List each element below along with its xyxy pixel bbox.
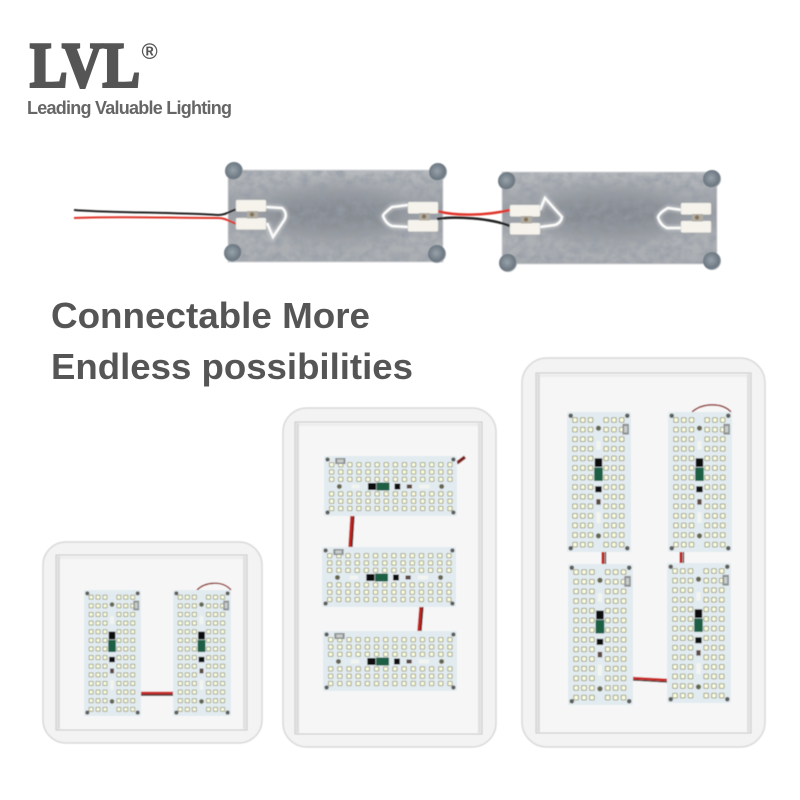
input wires	[74, 209, 237, 224]
wire right column	[681, 552, 684, 563]
headline line 2: Endless possibilities	[51, 346, 413, 387]
LED board bottom	[323, 631, 457, 691]
wire bottom link	[633, 678, 667, 682]
top feed wire	[197, 583, 231, 590]
wire middle to bottom board	[419, 607, 423, 631]
headline line 1: Connectable More	[51, 295, 370, 336]
logo tagline: Leading Valuable Lighting	[27, 98, 232, 118]
lamp: three modules	[283, 408, 496, 747]
feed wire stub	[457, 457, 465, 463]
LED board right	[173, 590, 231, 716]
LED board bottom left	[568, 564, 633, 705]
LED board left	[84, 590, 141, 716]
lamp: two modules	[43, 542, 262, 743]
LED board top	[324, 456, 457, 516]
logo	[27, 30, 232, 118]
wire left column	[603, 552, 606, 564]
LED board bottom right	[667, 563, 731, 703]
top feed wire	[692, 405, 731, 412]
logo wordmark LVL: LVL	[30, 30, 140, 100]
connecting wire	[141, 693, 173, 695]
plate 2	[498, 170, 721, 272]
connector pair, plate 1 left	[236, 200, 266, 230]
LED board middle	[322, 547, 456, 607]
lamp frame	[522, 358, 765, 747]
LED board top left	[567, 412, 631, 552]
loop wire glow	[266, 198, 682, 237]
connected metal plates photo	[74, 162, 721, 272]
lamp: four modules	[522, 358, 765, 747]
lamp frame	[283, 408, 496, 747]
wire top to middle board	[350, 516, 354, 547]
connector pair, plate 2 left	[510, 205, 540, 234]
LED board top right	[668, 412, 732, 552]
connector pair, plate 1 right	[408, 202, 438, 232]
loop wires	[266, 198, 682, 237]
lamp frame	[43, 542, 262, 743]
linking wires	[437, 210, 510, 226]
connector pair, plate 2 right	[681, 203, 711, 232]
headline	[51, 295, 413, 387]
registered mark: ®	[142, 39, 158, 64]
plate 1	[224, 162, 447, 263]
